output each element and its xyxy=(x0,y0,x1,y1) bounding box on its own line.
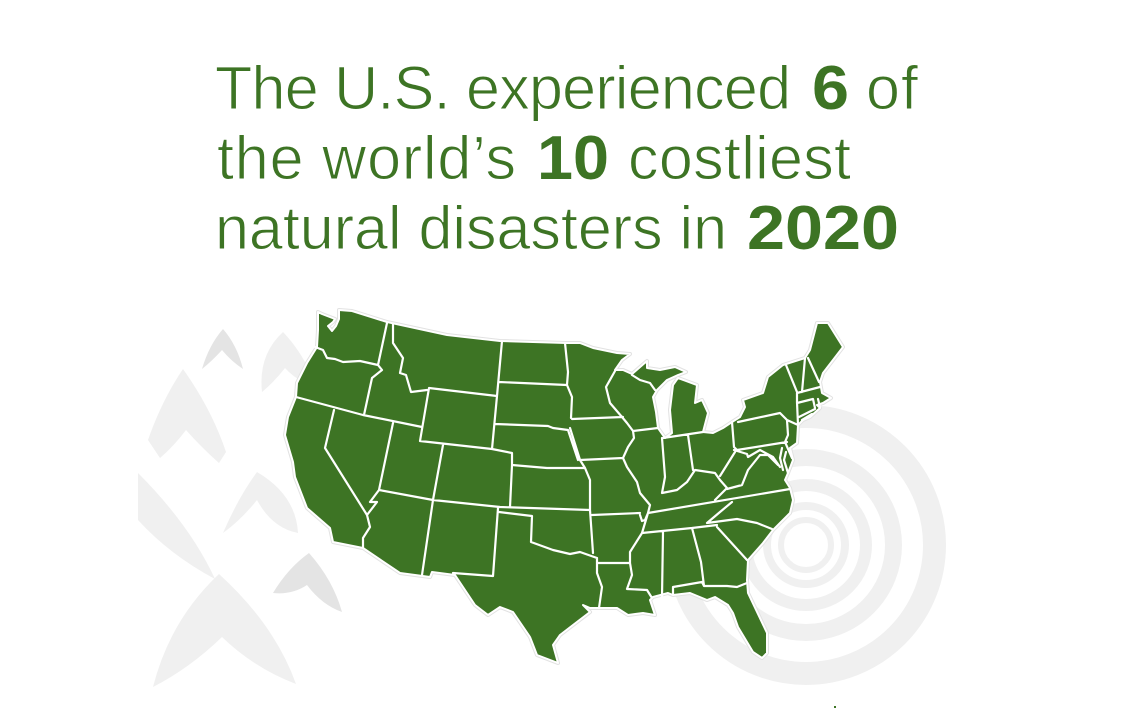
map outline halo xyxy=(285,310,843,663)
map landmass xyxy=(285,310,843,663)
title: of xyxy=(866,54,919,122)
small green speck xyxy=(834,706,836,708)
background: concentric hurricane rings xyxy=(678,416,934,674)
title: 2020 xyxy=(747,194,899,263)
title: 10 xyxy=(537,124,609,193)
title: the world’s xyxy=(217,124,516,192)
title: natural disasters in xyxy=(215,194,727,262)
map: contiguous United States xyxy=(285,310,843,663)
title: The U.S. experienced xyxy=(215,54,791,122)
map state borders xyxy=(296,323,820,608)
title: 6 xyxy=(812,54,849,123)
title: costliest xyxy=(628,124,851,192)
background: wind arrowhead shapes xyxy=(138,329,342,687)
title xyxy=(215,54,919,263)
